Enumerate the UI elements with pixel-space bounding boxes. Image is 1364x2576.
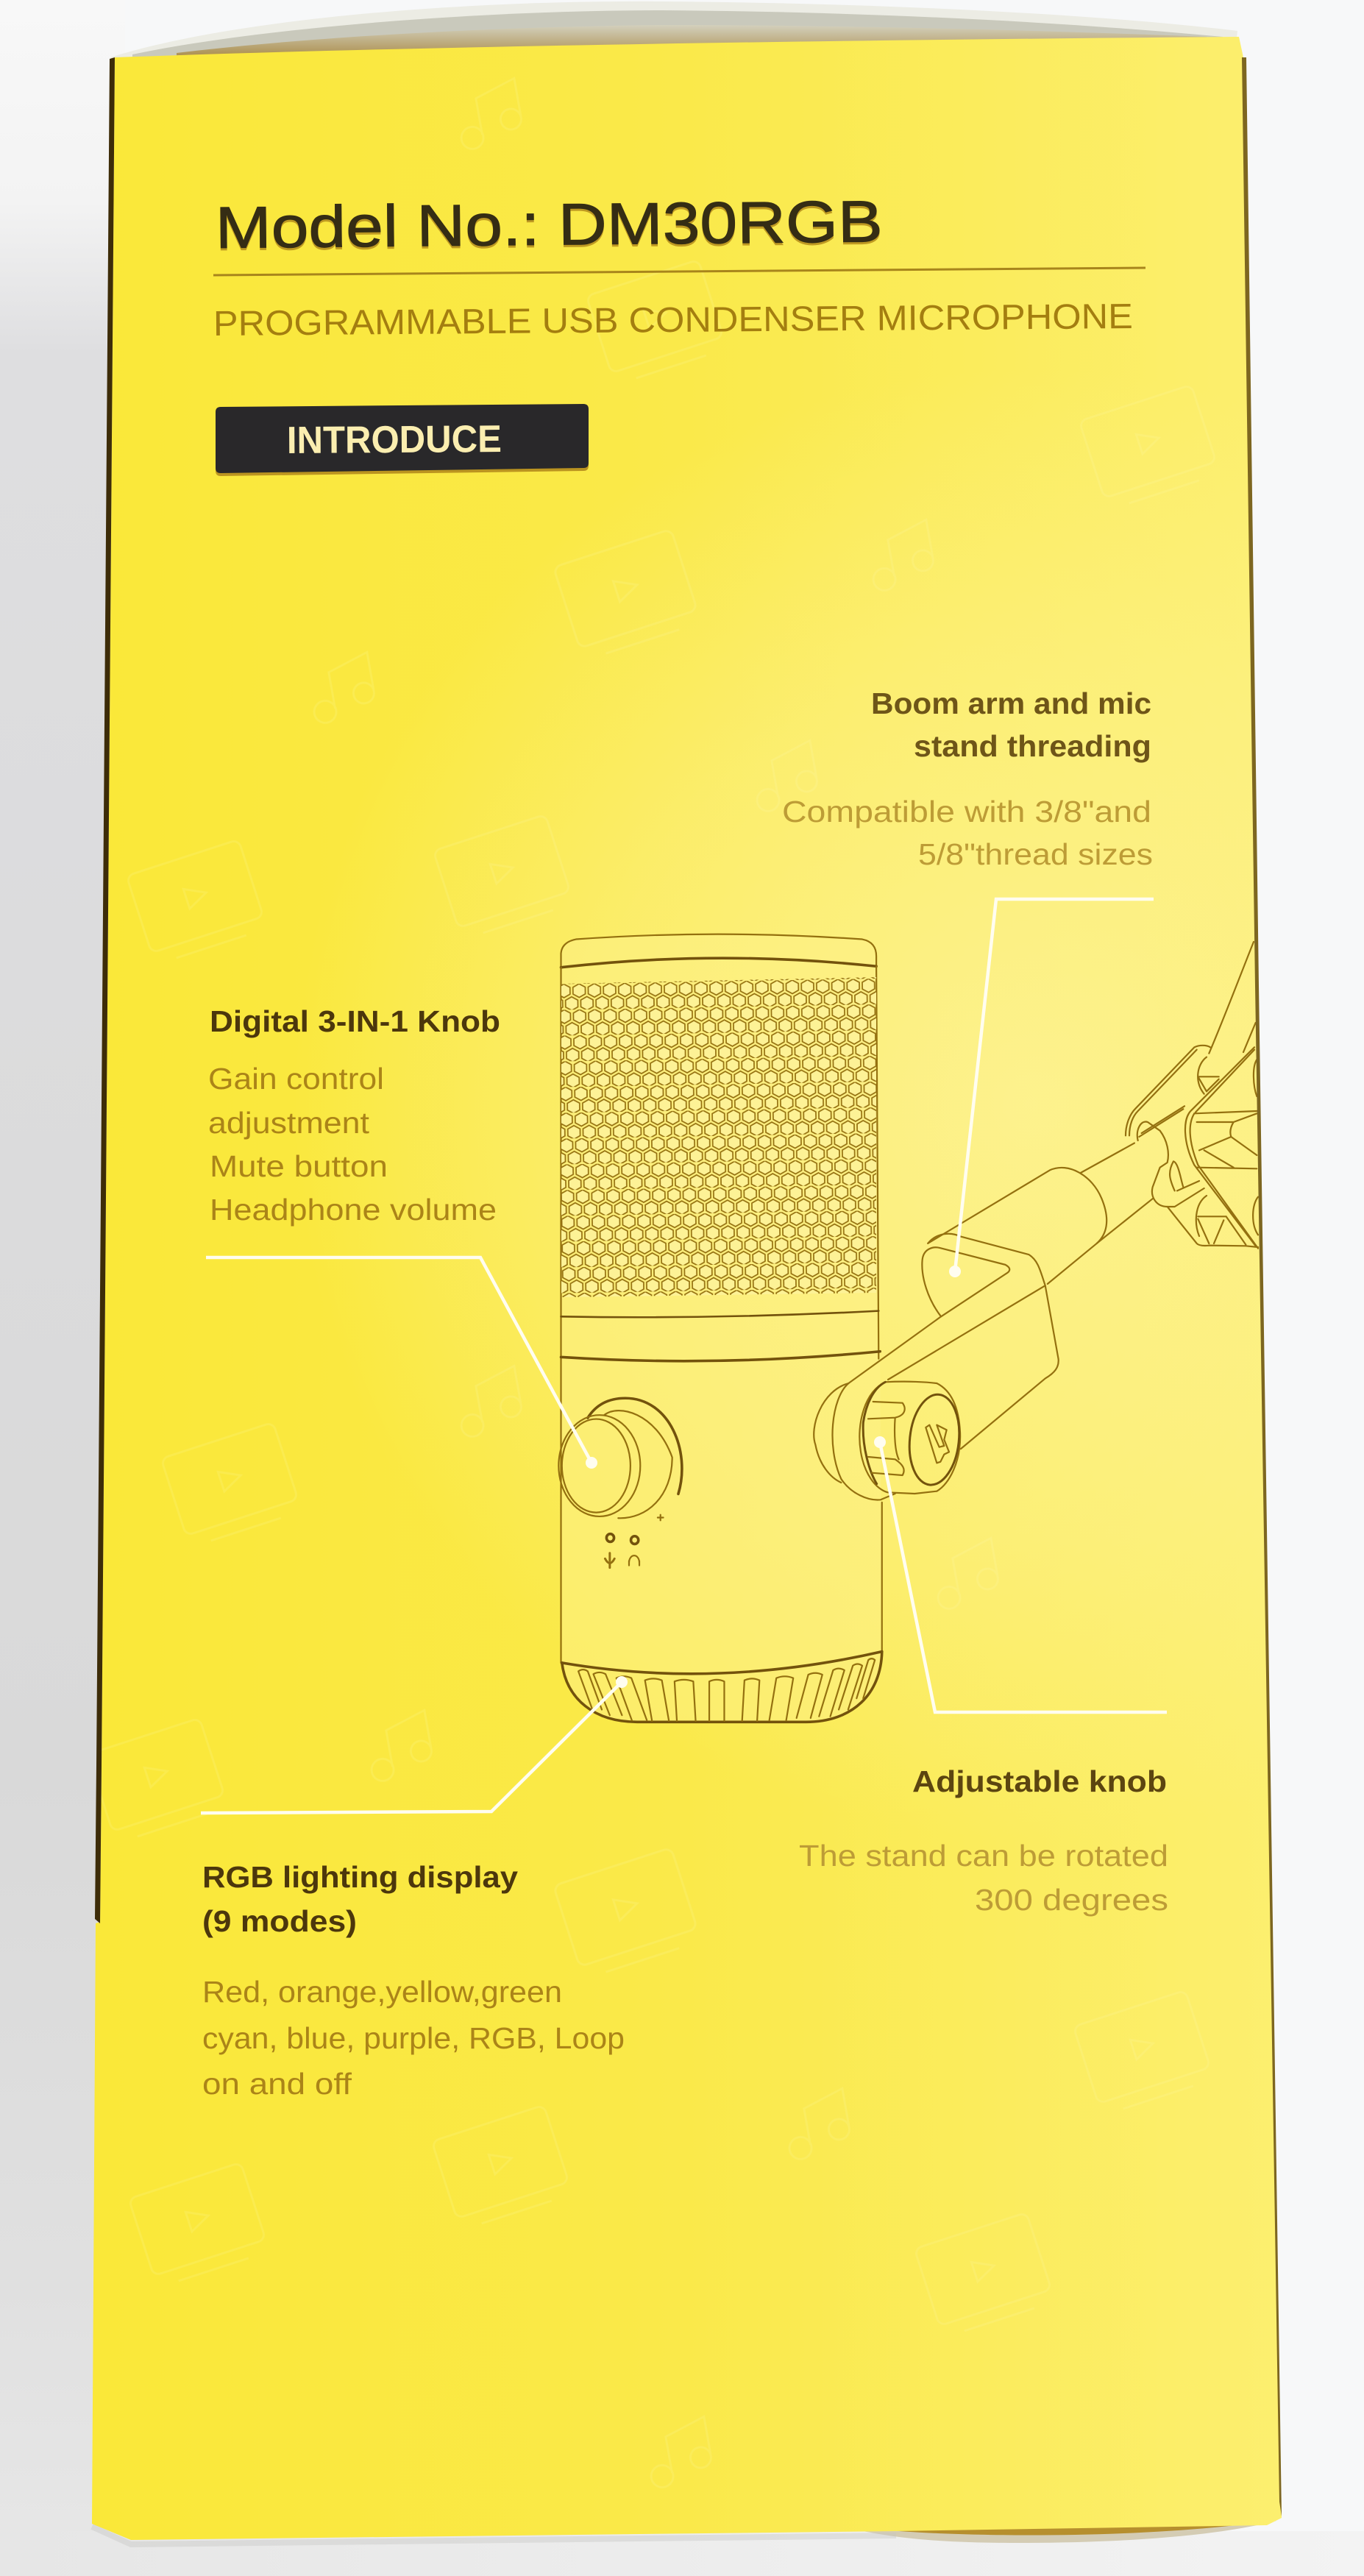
leader: adjustable knob	[874, 1436, 1167, 1712]
introduce badge: INTRODUCE	[287, 418, 502, 462]
callout text: rgb lighting: (9 modes)	[202, 1904, 357, 1938]
box dark left edge	[95, 57, 115, 1923]
callout text: digital knob	[208, 1004, 500, 1227]
box top flap	[110, 1, 1237, 62]
title: Model No.: DM30RGB	[215, 188, 883, 260]
adjustable knob and hub	[814, 1382, 964, 1500]
boom bracket arm	[848, 1143, 1153, 1449]
digital 3-in-1 knob	[558, 1398, 682, 1518]
callout text: boom arm threading: Boom arm and mic	[871, 686, 1151, 720]
plus mark	[658, 1515, 664, 1520]
callout text: boom arm threading: 5/8"thread sizes	[918, 837, 1153, 871]
mic base ring	[562, 1652, 882, 1722]
microphone illustration	[558, 934, 1153, 1722]
callout text: boom arm threading: Compatible with 3/8"and	[782, 795, 1151, 828]
callout text: rgb lighting: RGB lighting display	[202, 1860, 518, 1894]
leader: digital knob	[206, 1257, 597, 1469]
box soft shadow	[92, 2527, 896, 2544]
callout text: adjustable knob: Adjustable knob	[912, 1764, 1167, 1798]
callout text: adjustable knob	[799, 1764, 1168, 1917]
mic side walls	[561, 966, 882, 1663]
introduce badge	[216, 404, 589, 476]
mic body fill	[561, 934, 882, 1722]
callout text: digital knob: Headphone volume	[210, 1193, 497, 1227]
callout text: digital knob: Gain control	[208, 1062, 384, 1096]
callout text: rgb lighting: on and off	[202, 2067, 352, 2101]
microphone shock mount	[1126, 942, 1258, 1249]
status indicators	[605, 1534, 639, 1568]
callout text: digital knob: Digital 3-IN-1 Knob	[210, 1004, 500, 1038]
callout text: rgb lighting: Red, orange,yellow,green	[202, 1975, 562, 2009]
hexagonal mic grille	[559, 975, 878, 1300]
mic top cap	[561, 934, 876, 968]
title divider	[213, 268, 1145, 275]
callout text: rgb lighting	[202, 1860, 625, 2101]
callout text: adjustable knob: 300 degrees	[975, 1883, 1168, 1917]
callout text: digital knob: Mute button	[210, 1149, 388, 1183]
callout text: adjustable knob: The stand can be rotated	[799, 1839, 1168, 1873]
callout text: digital knob: adjustment	[208, 1106, 370, 1140]
callout text: boom arm threading	[782, 686, 1153, 871]
callout text: rgb lighting: cyan, blue, purple, RGB, Loop	[202, 2021, 625, 2055]
box right edge	[1242, 57, 1282, 2516]
box bottom flap	[856, 2521, 1276, 2543]
subtitle: PROGRAMMABLE USB CONDENSER MICROPHONE	[213, 297, 1133, 344]
callout text: boom arm threading: stand threading	[914, 729, 1151, 763]
leader: rgb lighting	[201, 1676, 628, 1813]
leader: boom arm threading	[949, 899, 1154, 1277]
collar bands	[561, 1311, 878, 1317]
